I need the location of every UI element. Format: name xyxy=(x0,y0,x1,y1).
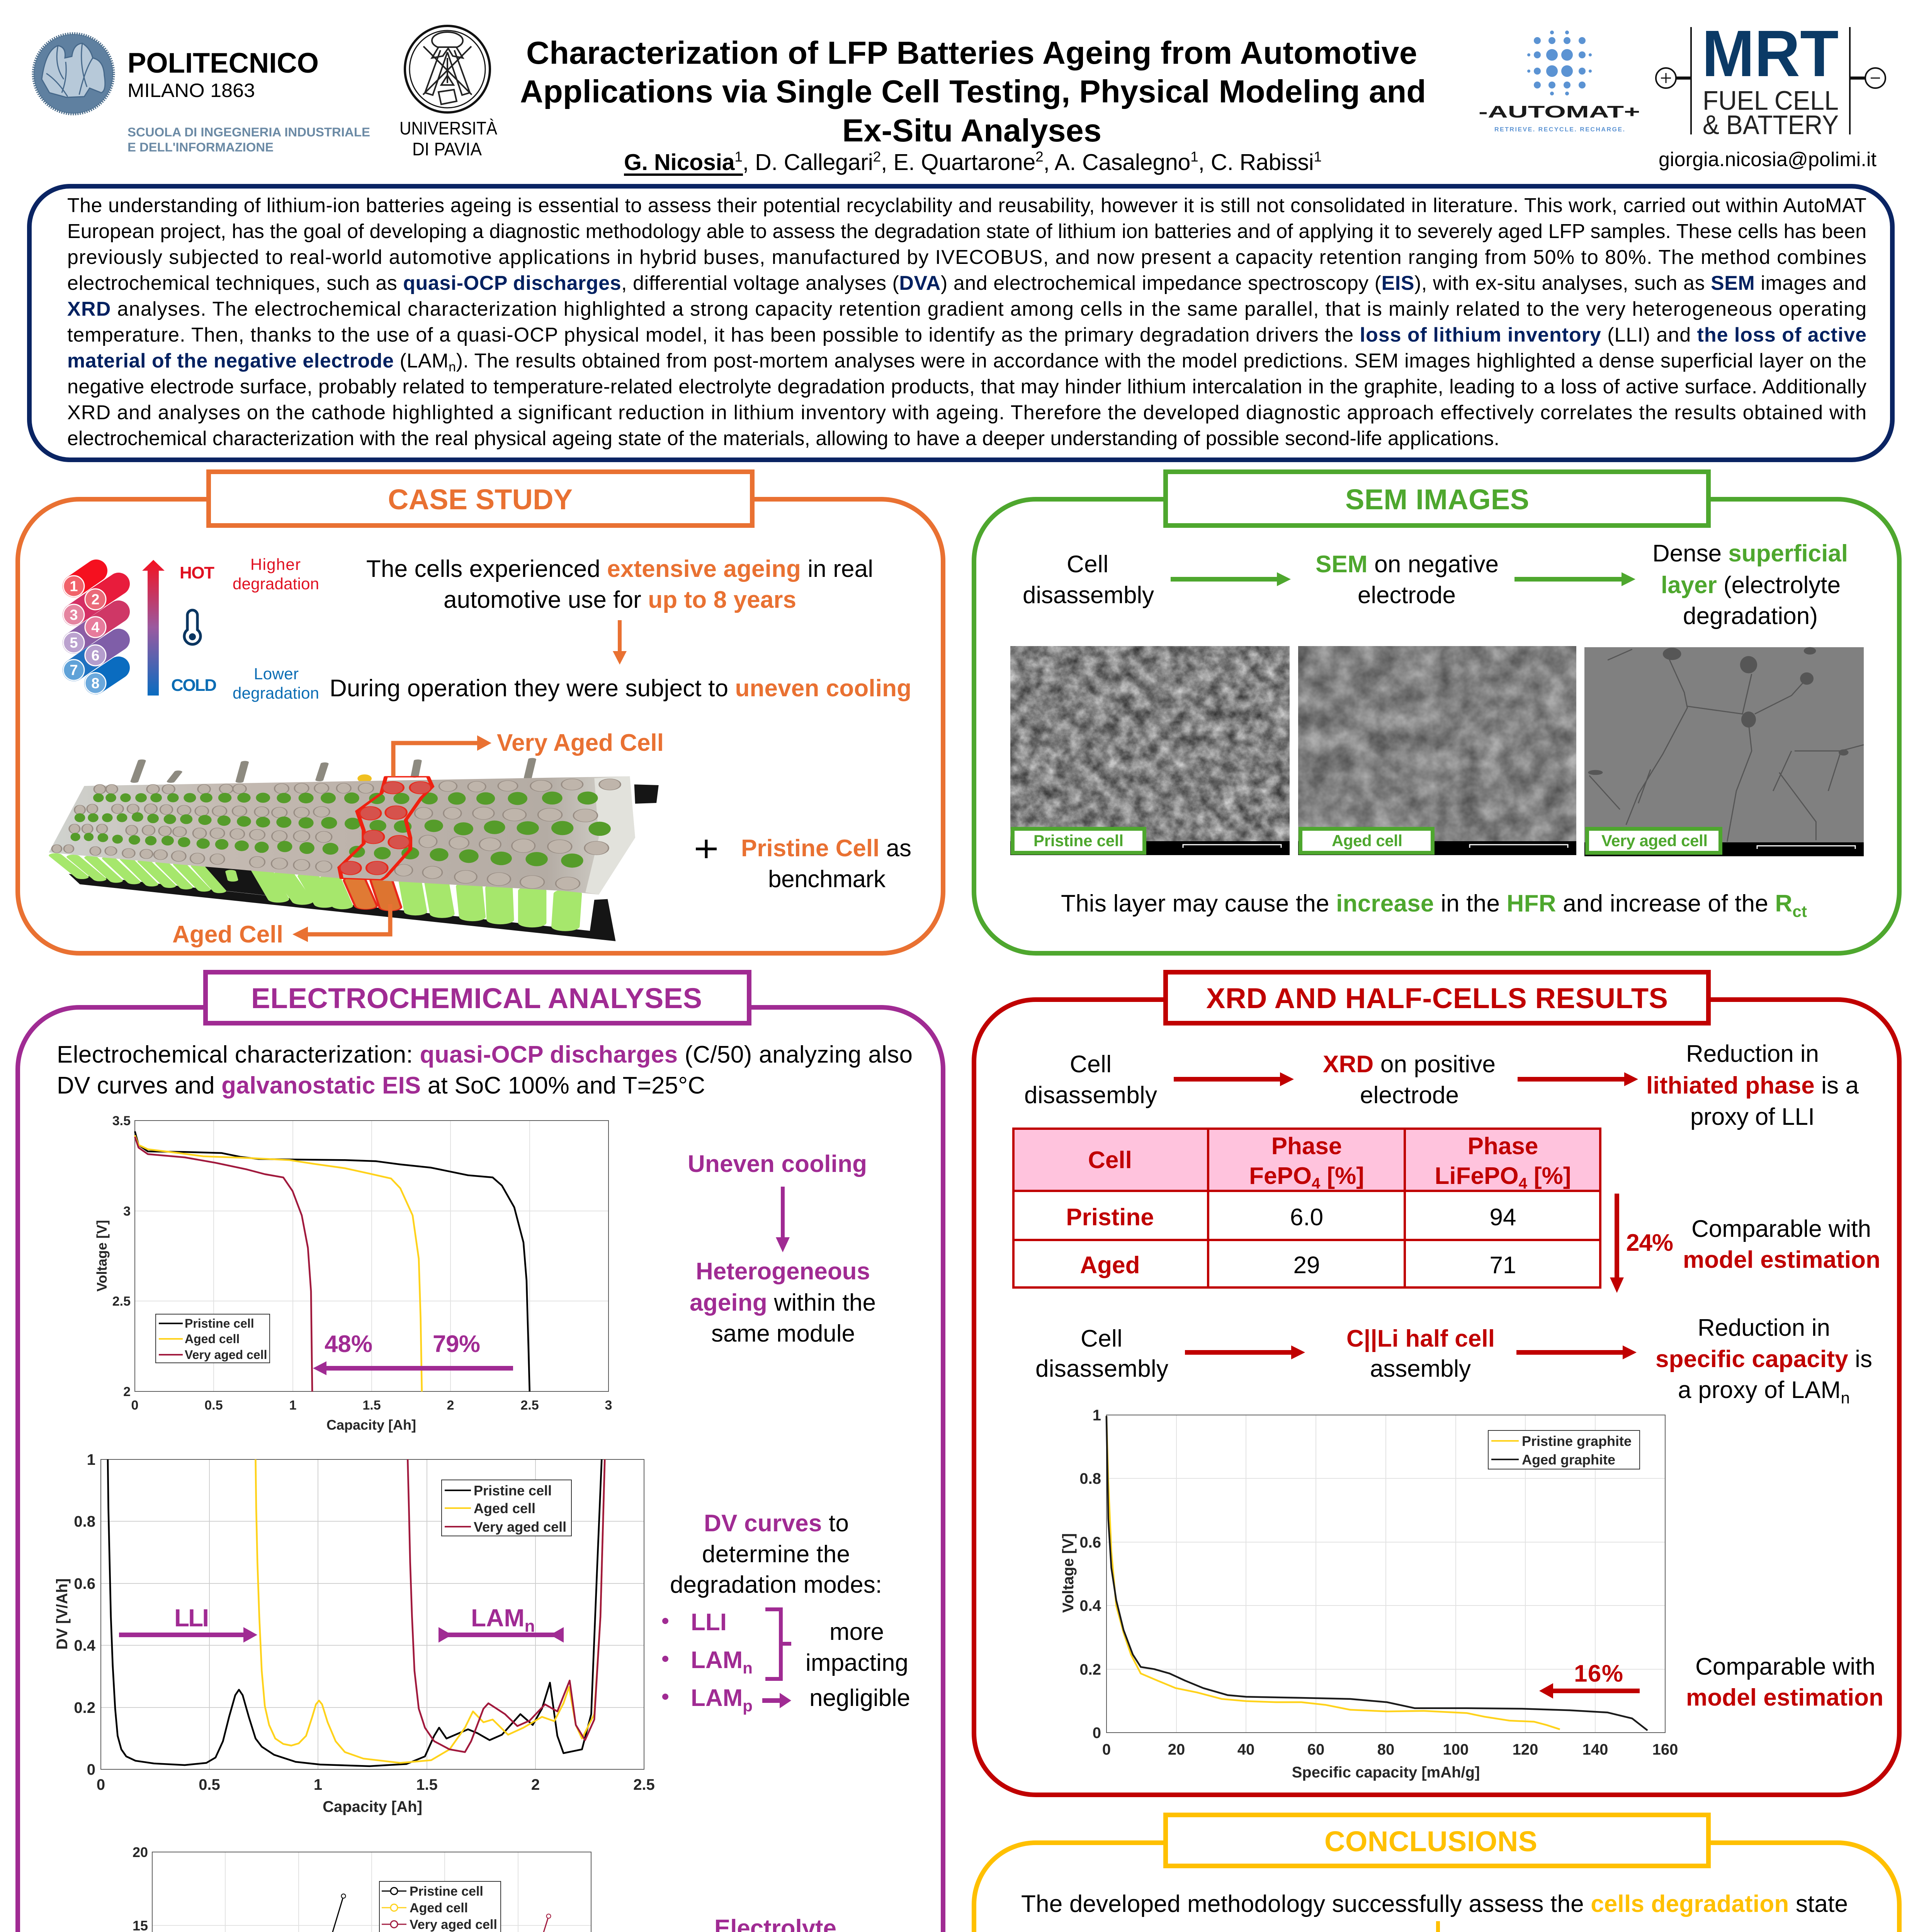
abstract text xyxy=(67,194,1866,450)
temperature labels: Lower xyxy=(254,665,299,683)
chart: half-cell voltage: 0 xyxy=(1102,1741,1111,1758)
uneven cooling flow: Heterogeneous xyxy=(696,1258,870,1285)
capacity retention annotation: 48% xyxy=(325,1331,372,1357)
authors: G. Nicosia xyxy=(624,150,735,175)
case study description: automotive use for up to 8 years xyxy=(444,587,796,613)
step: specific capacity reduction: specific capacity is xyxy=(1656,1346,1872,1372)
title: Ex-Situ Analyses xyxy=(842,112,1101,148)
label: aged cell: Aged Cell xyxy=(172,921,283,948)
half-cell comparison note: Comparable with xyxy=(1695,1653,1875,1680)
table: XRD phases: 4 xyxy=(1519,1175,1528,1192)
heading: XRD and half-cells results: XRD AND HALF-CELLS RESULTS xyxy=(1206,982,1668,1014)
icon: numbered cells: 1 xyxy=(70,578,78,595)
chart: voltage vs capacity: Voltage [V] xyxy=(94,1220,110,1292)
abstract text: electrochemical techniques, such as quasi-OCP discharges, differential voltage analyses (DVA) and electrochemical impedance spectroscopy (EIS), with ex-situ analyses, such as SEM images and xyxy=(67,272,1866,294)
step: cell disassembly xyxy=(1035,1325,1168,1382)
DV curves explanation: more xyxy=(829,1619,884,1645)
step: SEM on negative electrode xyxy=(1316,551,1499,609)
SEM image: very aged cell xyxy=(1584,647,1864,856)
step: dense superficial layer: degradation) xyxy=(1683,603,1818,629)
panel: abstract xyxy=(29,186,1892,460)
chart: differential voltage: 0.5 xyxy=(199,1776,220,1793)
abstract text: previously subjected to real-world automotive applications in hybrid buses, manufactured by IVECOBUS, and now present a capacity retention ranging from 50% to 80%. The method combines xyxy=(67,246,1866,269)
DV curves explanation: impacting xyxy=(806,1650,908,1676)
intro text: Electrochemical characterization: quasi-OCP discharges (C/50) analyzing also xyxy=(57,1041,913,1068)
logo: MRT Fuel Cell and Battery: MRT xyxy=(1702,17,1839,90)
heading: SEM images xyxy=(1166,472,1708,526)
chart: differential voltage: 2.5 xyxy=(633,1776,655,1793)
image: battery module xyxy=(49,759,659,941)
authors: 2 xyxy=(1035,149,1044,165)
chart: half-cell voltage: 80 xyxy=(1377,1741,1394,1758)
label: aged cell xyxy=(1300,829,1433,853)
half-cell comparison note: model estimation xyxy=(1686,1684,1883,1711)
label: aged cell: Aged cell xyxy=(1332,832,1402,850)
chart: differential voltage xyxy=(54,1451,655,1815)
step: dense superficial layer: layer (electrolyte xyxy=(1661,572,1841,599)
XRD comparison note xyxy=(1626,1216,1880,1273)
label: very aged cell: Very aged cell xyxy=(1601,832,1708,850)
logo: Universita di Pavia xyxy=(399,26,498,159)
step: SEM on negative electrode: electrode xyxy=(1358,582,1456,609)
capacity retention annotation: 79% xyxy=(433,1331,480,1357)
icon: numbered cells: 2 xyxy=(91,592,100,608)
chart: half-cell voltage xyxy=(1060,1407,1678,1781)
chart: half-cell voltage: Voltage [V] xyxy=(1060,1533,1077,1613)
SEM image: aged cell xyxy=(1298,646,1576,855)
chart: voltage vs capacity: 3 xyxy=(605,1398,612,1413)
title xyxy=(520,35,1426,148)
step: SEM on negative electrode: SEM on negative xyxy=(1316,551,1499,578)
chart: half-cell voltage: 60 xyxy=(1307,1741,1324,1758)
step: XRD on positive electrode xyxy=(1323,1051,1496,1109)
legend: Pristine graphite xyxy=(1522,1433,1632,1449)
legend: Aged cell xyxy=(185,1332,240,1346)
chart: half-cell voltage: 160 xyxy=(1652,1741,1678,1758)
chart: half-cell voltage: 0.2 xyxy=(1079,1661,1101,1678)
step: dense superficial layer xyxy=(1652,540,1848,629)
uneven cooling flow: same module xyxy=(711,1320,855,1347)
step: half cell assembly xyxy=(1346,1325,1495,1382)
step: XRD on positive electrode: XRD on positive xyxy=(1323,1051,1496,1078)
arrow: temperature gradient xyxy=(142,560,165,696)
step: specific capacity reduction: Reduction in xyxy=(1698,1315,1830,1341)
table: XRD phases: Aged xyxy=(1080,1252,1140,1279)
table: XRD phases: Phase xyxy=(1271,1133,1342,1160)
authors: , C. Rabissi xyxy=(1198,150,1314,175)
chart: half-cell voltage: 20 xyxy=(1168,1741,1185,1758)
panel: conclusions xyxy=(974,1815,1899,1932)
chart: voltage vs capacity: 2 xyxy=(447,1398,454,1413)
temperature labels: COLD xyxy=(171,676,217,695)
panel: SEM images xyxy=(974,472,1899,953)
table: XRD phases: 4 xyxy=(1312,1175,1321,1192)
step: cell disassembly xyxy=(1023,551,1154,609)
chart: half-cell voltage: 120 xyxy=(1513,1741,1538,1758)
arrow xyxy=(1431,1921,1445,1932)
arrow xyxy=(1171,572,1291,586)
chart: differential voltage: 2 xyxy=(531,1776,540,1793)
step: half cell assembly: C||Li half cell xyxy=(1346,1325,1495,1352)
authors: 1 xyxy=(1314,149,1322,165)
step: specific capacity reduction: n xyxy=(1841,1389,1850,1407)
legend: Aged graphite xyxy=(1522,1452,1615,1468)
authors: , E. Quartarone xyxy=(881,150,1035,175)
icon: numbered cells: 5 xyxy=(70,635,78,651)
XRD comparison note: 24% xyxy=(1626,1230,1673,1256)
icon: numbered cells: 6 xyxy=(91,648,100,664)
arrow: aged cell xyxy=(292,904,390,942)
bracket xyxy=(765,1609,791,1679)
degradation mode list: LLI xyxy=(691,1609,727,1636)
degradation mode list: n xyxy=(743,1659,753,1677)
step: lithiated phase reduction xyxy=(1646,1041,1859,1130)
icon: numbered cells: 7 xyxy=(70,662,78,679)
chart: differential voltage: 1 xyxy=(87,1451,95,1468)
uneven cooling flow: Uneven cooling xyxy=(688,1151,867,1177)
table: XRD phases xyxy=(1013,1129,1600,1287)
heading: case study: CASE STUDY xyxy=(388,483,573,515)
pristine cell benchmark text xyxy=(741,835,911,893)
chart: Nyquist EIS xyxy=(115,1844,599,1932)
step: lithiated phase reduction: proxy of LLI xyxy=(1690,1104,1815,1130)
authors: 2 xyxy=(873,149,881,165)
temperature labels: degradation xyxy=(233,575,319,593)
heading: XRD and half-cells results xyxy=(1166,972,1708,1023)
table: XRD phases: 29 xyxy=(1293,1252,1320,1279)
annotation: LAMn: n xyxy=(525,1617,535,1636)
logo: Politecnico di Milano xyxy=(33,34,370,154)
chart: voltage vs capacity: 2.5 xyxy=(520,1398,539,1413)
legend xyxy=(379,1881,501,1932)
abstract text: European project, has the goal of developing a diagnostic methodology able to assess the degradation state of lithium ion batteries and of applying it to severely aged LFP samples. These cells has been xyxy=(67,220,1866,243)
label: very aged cell: Very Aged Cell xyxy=(497,730,664,756)
legend: Very aged cell xyxy=(410,1917,497,1932)
step: lithiated phase reduction: lithiated phase is a xyxy=(1646,1072,1859,1099)
heading: electrochemical analyses xyxy=(206,972,749,1023)
abstract text: electrochemical characterization with the real physical ageing state of the materials, allowing to have a deeper understanding of possible second-life applications. xyxy=(67,427,1499,450)
arrow: 24 percent xyxy=(1610,1194,1624,1293)
chart: half-cell voltage: Specific capacity [mAh/g] xyxy=(1292,1764,1480,1781)
label: pristine cell: Pristine cell xyxy=(1033,832,1124,850)
pristine cell benchmark text: Pristine Cell as xyxy=(741,835,911,862)
abstract text: XRD analyses. The electrochemical characterization highlighted a strong capacity retention gradient among cells in the same parallel, that is mainly related to the very heterogeneous operating xyxy=(67,298,1866,320)
label: pristine cell xyxy=(1013,829,1144,853)
case study description: The cells experienced extensive ageing in real xyxy=(366,556,873,582)
degradation mode list xyxy=(662,1609,753,1715)
half-cell comparison note xyxy=(1686,1653,1883,1711)
table: XRD phases: 6.0 xyxy=(1290,1204,1323,1231)
header band xyxy=(33,17,1885,176)
pristine cell benchmark text: benchmark xyxy=(768,866,886,893)
chart: differential voltage: Capacity [Ah] xyxy=(323,1798,422,1815)
SEM conclusion text: ct xyxy=(1792,902,1807,920)
legend: Pristine cell xyxy=(410,1884,483,1899)
XRD comparison note: model estimation xyxy=(1683,1247,1880,1273)
chart: half-cell voltage: 1 xyxy=(1093,1407,1101,1424)
chart: differential voltage: 0.8 xyxy=(74,1513,95,1530)
degradation mode list: LAM xyxy=(691,1685,743,1711)
legend xyxy=(442,1480,571,1536)
chart: voltage vs capacity xyxy=(94,1114,612,1433)
temperature labels: HOT xyxy=(180,563,214,582)
DV curves explanation: degradation modes: xyxy=(670,1571,882,1598)
heading: conclusions: CONCLUSIONS xyxy=(1324,1825,1537,1857)
chart: differential voltage: 1 xyxy=(314,1776,322,1793)
chart: half-cell voltage: 0.6 xyxy=(1079,1534,1101,1551)
chart: voltage vs capacity: 1 xyxy=(289,1398,296,1413)
degradation mode list: p xyxy=(743,1697,753,1715)
case study description xyxy=(330,556,911,702)
logo: MRT Fuel Cell and Battery xyxy=(1656,17,1885,140)
legend xyxy=(156,1314,270,1363)
contact email: giorgia.nicosia@polimi.it xyxy=(1659,148,1877,171)
logo: AutoMat xyxy=(1479,31,1640,133)
title: Applications via Single Cell Testing, Physical Modeling and xyxy=(520,73,1426,109)
conclusion 1: The developed methodology successfully assess the cells degradation state xyxy=(1021,1891,1848,1917)
icon: numbered cells: 8 xyxy=(91,675,100,692)
chart: half-cell voltage: 140 xyxy=(1582,1741,1608,1758)
legend: Aged cell xyxy=(410,1901,468,1915)
chart: differential voltage: 1.5 xyxy=(416,1776,438,1793)
arrow: case study flow xyxy=(613,620,627,665)
table: XRD phases: FePO xyxy=(1249,1163,1312,1189)
logo: Universita di Pavia: UNIVERSITÀ xyxy=(399,118,498,138)
uneven cooling flow xyxy=(688,1151,876,1347)
logo: AutoMat: -AUTOMAT+ xyxy=(1479,102,1640,121)
DV curves explanation xyxy=(662,1510,910,1715)
abstract text: material of the negative electrode (LAM xyxy=(67,350,449,372)
chart: half-cell voltage: 0.8 xyxy=(1079,1470,1101,1487)
arrow xyxy=(1185,1345,1305,1359)
chart: differential voltage: 0 xyxy=(87,1761,95,1778)
authors xyxy=(624,149,1322,176)
intro text xyxy=(57,1041,913,1099)
logo: MRT Fuel Cell and Battery: & BATTERY xyxy=(1703,110,1839,140)
DV curves explanation: negligible xyxy=(809,1685,910,1711)
annotation: 16 percent xyxy=(1539,1660,1640,1699)
label: very aged cell xyxy=(1587,829,1720,853)
arrow xyxy=(1518,1072,1638,1086)
chart: differential voltage: DV [V/Ah] xyxy=(54,1578,71,1650)
logo: Politecnico di Milano: MILANO 1863 xyxy=(127,80,255,101)
heading: case study xyxy=(209,472,752,526)
intro text: DV curves and galvanostatic EIS at SoC 100% and T=25°C xyxy=(57,1072,705,1099)
logo: Politecnico di Milano: E DELL'INFORMAZIONE xyxy=(127,140,274,154)
case study description: During operation they were subject to uneven cooling xyxy=(330,675,911,702)
step: cell disassembly xyxy=(1024,1051,1157,1109)
logo: AutoMat: RETRIEVE. RECYCLE. RECHARGE. xyxy=(1494,126,1625,133)
chart: half-cell voltage: 100 xyxy=(1443,1741,1469,1758)
step: specific capacity reduction xyxy=(1656,1315,1872,1407)
legend: Pristine cell xyxy=(474,1483,552,1498)
heading: conclusions xyxy=(1166,1815,1708,1866)
step: specific capacity reduction: a proxy of LAM xyxy=(1678,1377,1841,1403)
arrow xyxy=(762,1693,791,1708)
chart: half-cell voltage: 0.4 xyxy=(1079,1597,1101,1614)
DV curves explanation: determine the xyxy=(702,1541,850,1568)
annotation: 16 percent: 16% xyxy=(1574,1660,1623,1687)
chart: half-cell voltage: 40 xyxy=(1237,1741,1254,1758)
legend: Very aged cell xyxy=(474,1519,566,1535)
legend: Aged cell xyxy=(474,1500,535,1516)
authors: , D. Callegari xyxy=(743,150,873,175)
chart: differential voltage: 0 xyxy=(97,1776,105,1793)
annotation: LLI: LLI xyxy=(174,1604,209,1632)
temperature labels: degradation xyxy=(233,684,319,702)
chart: differential voltage: 0.2 xyxy=(74,1699,95,1716)
annotation: LAMn: LAM xyxy=(471,1604,525,1632)
capacity retention annotation xyxy=(313,1331,513,1375)
abstract text: negative electrode surface, probably related to temperature-related electrolyte degradation products, that may hinder lithium intercalation in the graphite, leading to a loss of active surface. Additionally xyxy=(67,376,1866,398)
step: half cell assembly: assembly xyxy=(1370,1355,1471,1382)
panel: XRD and half-cells results xyxy=(974,972,1899,1795)
step: cell disassembly: disassembly xyxy=(1024,1082,1157,1109)
logo: MRT Fuel Cell and Battery: FUEL CELL xyxy=(1703,85,1839,116)
chart: half-cell voltage: 0 xyxy=(1093,1725,1101,1742)
chart: voltage vs capacity: 0 xyxy=(131,1398,138,1413)
step: cell disassembly: disassembly xyxy=(1035,1355,1168,1382)
temperature labels: Higher xyxy=(250,555,301,573)
heading: SEM images: SEM IMAGES xyxy=(1345,483,1529,515)
table: XRD phases: LiFePO xyxy=(1435,1163,1519,1189)
table: XRD phases: [%] xyxy=(1527,1163,1571,1189)
table: XRD phases: [%] xyxy=(1320,1163,1364,1189)
step: cell disassembly: disassembly xyxy=(1023,582,1154,609)
annotation: LLI xyxy=(119,1604,257,1643)
arrow xyxy=(1514,572,1635,586)
step: lithiated phase reduction: Reduction in xyxy=(1686,1041,1819,1067)
abstract text: The understanding of lithium-ion batteries ageing is essential to assess their potential recyclability and reusability, however it is still not consolidated in literature. This work, carried out within AutoMAT xyxy=(67,194,1866,217)
table: XRD phases: Cell xyxy=(1088,1147,1132,1173)
chart: differential voltage: 0.4 xyxy=(74,1637,96,1654)
logo: Universita di Pavia: DI PAVIA xyxy=(412,139,482,159)
arrow xyxy=(1174,1072,1294,1086)
arrow xyxy=(1516,1345,1637,1359)
chart: voltage vs capacity: Capacity [Ah] xyxy=(326,1417,416,1433)
authors: 1 xyxy=(1190,149,1198,165)
table: XRD phases: 94 xyxy=(1490,1204,1516,1231)
abstract text: temperature. Then, thanks to the use of a quasi-OCP physical model, it has been possible to identify as the primary degradation drivers the loss of lithium inventory (LLI) and the loss of active xyxy=(67,324,1866,346)
annotation: LAMn xyxy=(439,1604,564,1643)
SEM conclusion text: This layer may cause the increase in the HFR and increase of the R xyxy=(1061,890,1792,917)
chart: voltage vs capacity: 3 xyxy=(123,1204,131,1219)
panel: electrochemical analyses xyxy=(18,972,943,1932)
uneven cooling flow: ageing within the xyxy=(690,1289,876,1316)
legend: Pristine cell xyxy=(185,1316,254,1330)
abstract text: XRD and analyses on the cathode highlighted a significant reduction in lithium inventory with ageing. Therefore the developed diagnostic approach effectively correlates the results obtained with xyxy=(67,401,1866,424)
abstract text: ). The results obtained from post-mortem analyses were in accordance with the model predictions. SEM images highlighted a dense superficial layer on the xyxy=(456,350,1866,372)
logo: Politecnico di Milano: SCUOLA DI INGEGNERIA INDUSTRIALE xyxy=(127,125,370,139)
icon: numbered cells xyxy=(63,571,119,694)
icon: thermometer xyxy=(184,610,201,644)
table: XRD phases: Pristine xyxy=(1066,1204,1154,1231)
chart: voltage vs capacity: 3.5 xyxy=(112,1114,131,1128)
step: cell disassembly: Cell xyxy=(1067,551,1108,578)
step: XRD on positive electrode: electrode xyxy=(1360,1082,1459,1109)
panel: case study xyxy=(18,472,943,953)
abstract text: n xyxy=(449,360,456,374)
authors: , A. Casalegno xyxy=(1043,150,1190,175)
XRD comparison note: Comparable with xyxy=(1691,1216,1871,1242)
icon: plus sign xyxy=(696,840,717,858)
temperature labels xyxy=(171,555,319,702)
title: Characterization of LFP Batteries Ageing from Automotive xyxy=(526,35,1417,71)
chart: voltage vs capacity: 2.5 xyxy=(112,1294,131,1309)
arrow: very aged cell xyxy=(393,735,491,777)
icon: numbered cells: 4 xyxy=(91,619,100,636)
chart: Nyquist EIS: 20 xyxy=(133,1844,148,1860)
chart: voltage vs capacity: 0.5 xyxy=(204,1398,223,1413)
icon: numbered cells: 3 xyxy=(70,607,78,623)
degradation mode list: LAM xyxy=(691,1647,743,1673)
step: cell disassembly: Cell xyxy=(1081,1325,1122,1352)
logo: Politecnico di Milano: POLITECNICO xyxy=(127,48,319,79)
heading: electrochemical analyses: ELECTROCHEMICAL ANALYSES xyxy=(251,982,702,1014)
SEM image: pristine cell xyxy=(1010,646,1290,855)
chart: voltage vs capacity: 1.5 xyxy=(362,1398,381,1413)
legend xyxy=(1488,1430,1640,1469)
chart: differential voltage: 0.6 xyxy=(74,1575,95,1592)
step: cell disassembly: Cell xyxy=(1070,1051,1112,1078)
arrow xyxy=(776,1187,790,1252)
table: XRD phases: 71 xyxy=(1490,1252,1516,1279)
legend: Very aged cell xyxy=(185,1348,267,1362)
DV curves explanation: DV curves to xyxy=(704,1510,849,1537)
chart: voltage vs capacity: 2 xyxy=(123,1384,131,1399)
table: XRD phases: Phase xyxy=(1468,1133,1538,1160)
authors: 1 xyxy=(734,149,743,165)
step: dense superficial layer: Dense superficial xyxy=(1652,540,1848,567)
